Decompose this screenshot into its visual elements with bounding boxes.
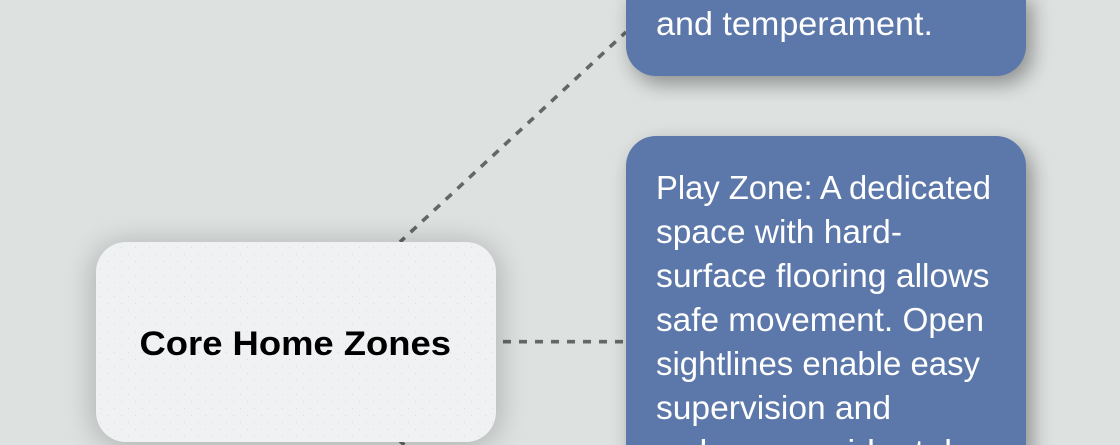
panel: core home zones: [92, 242, 500, 445]
text: play zone description: supervision and: [656, 389, 891, 426]
connector: core zones to play zone: [503, 340, 624, 344]
text: play zone description: surface flooring allows: [656, 257, 990, 294]
text: play zone description: Play Zone: A dedicated: [656, 169, 991, 206]
text: play zone description: sightlines enable easy: [656, 345, 980, 382]
panel: upper zone card: [626, 0, 1032, 84]
text: play zone description: safe movement. Open: [656, 301, 984, 338]
text: upper card closing line: and temperament.: [656, 5, 933, 42]
connector: core zones to upper card: [400, 32, 626, 242]
panel: play zone card: [626, 136, 1032, 445]
heading: core home zones: Core Home Zones: [140, 325, 451, 363]
text: play zone description: space with hard-: [656, 213, 902, 250]
text: play zone description: [656, 169, 991, 445]
connector: core zones to lower card: [400, 441, 404, 445]
